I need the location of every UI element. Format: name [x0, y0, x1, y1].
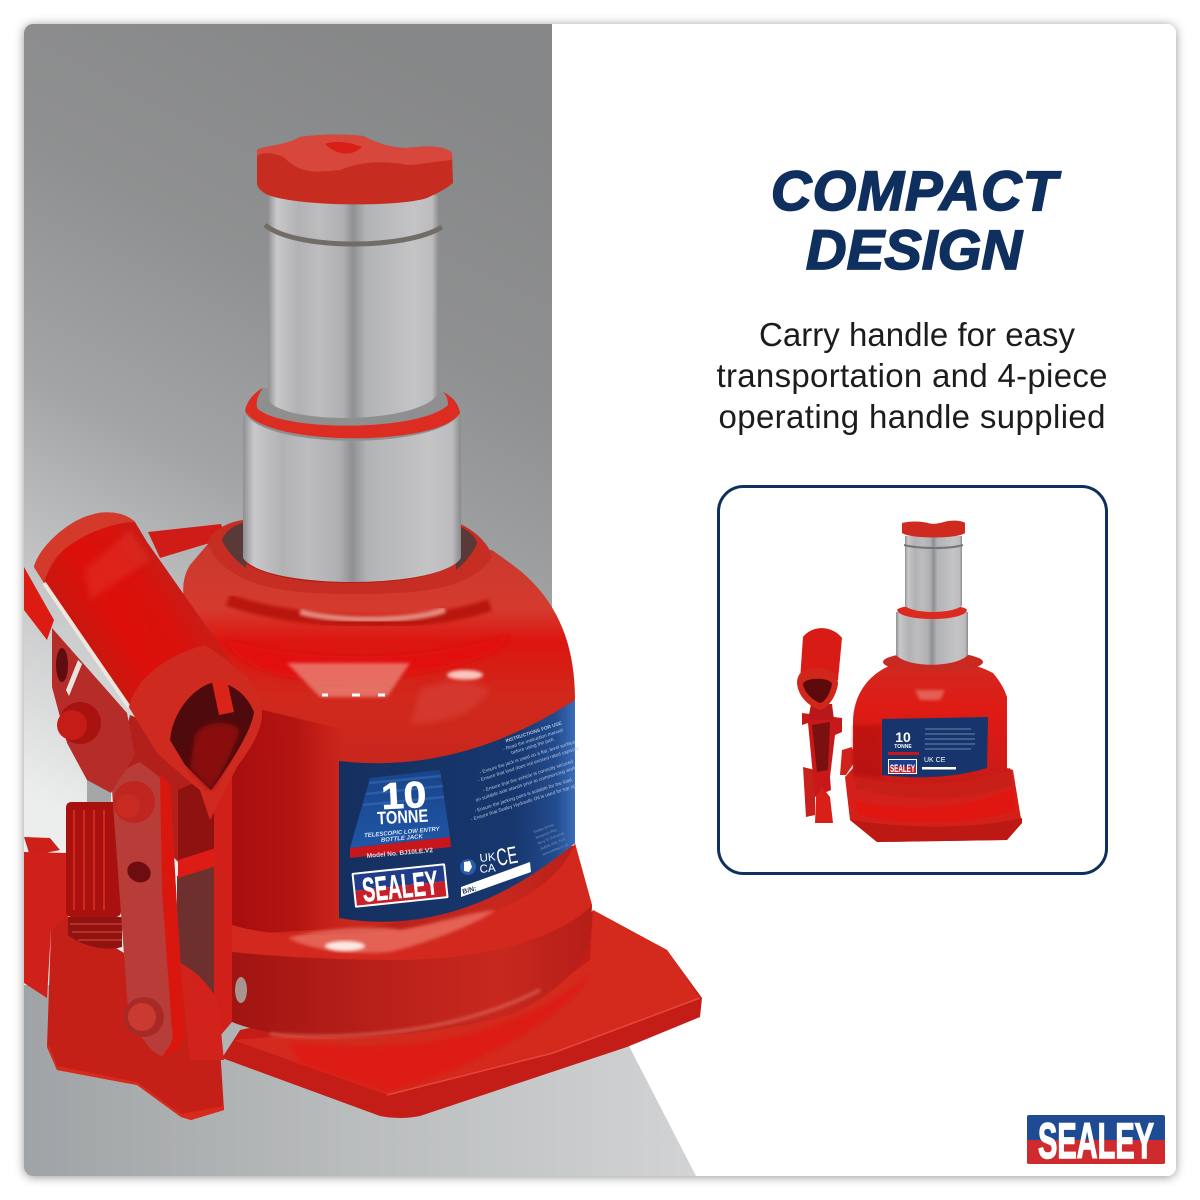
inset product photo: small jack: UK CE [924, 757, 946, 764]
product label: B/N: [462, 885, 477, 896]
upper ram cylinder [265, 195, 442, 418]
small jack collar [896, 612, 968, 665]
small jack neck [883, 652, 983, 672]
small jack ram [905, 536, 962, 612]
small jack dome [853, 659, 1007, 784]
jack dome body [183, 545, 575, 935]
small jack lever stub [803, 767, 815, 817]
weld bead [228, 600, 490, 621]
label instructions: - Read the instruction manual [502, 727, 564, 753]
rear link and dark gap [112, 715, 247, 1060]
flange wall [232, 845, 592, 1038]
inset product photo: small jack [797, 521, 1022, 842]
label address block: Kempson Way [535, 828, 558, 840]
product label: TONNE [377, 806, 429, 828]
telescopic collar [243, 388, 461, 582]
label instructions: - Ensure the jack is used on a flat, level surface. [479, 739, 578, 776]
product label: CE [494, 842, 520, 872]
inset box [718, 486, 1106, 874]
small jack cap [902, 521, 965, 538]
label address block: Sealey Group [533, 823, 554, 834]
foot plate [222, 910, 702, 1118]
small jack base [845, 768, 1022, 842]
inset product photo: small jack: TONNE [894, 744, 912, 750]
product label: Model No. BJ10LE.V2 [366, 847, 434, 860]
label instructions [471, 721, 578, 820]
label instructions: on suitable axle stands prior to commencing work. [475, 765, 578, 804]
heading: DESIGN [806, 218, 1024, 281]
small jack pump handle [797, 628, 842, 823]
product label: TELESCOPIC LOW ENTRY [364, 827, 441, 839]
label instructions: - Ensure that the vehicle is correctly secured [482, 759, 574, 794]
flange ledge [232, 843, 592, 960]
label instructions: before using the jack. [510, 736, 556, 756]
product label: CA [479, 862, 497, 876]
label instructions: - Ensure the jacking point is suitable for the load. [474, 777, 574, 814]
label address block: www.sealey.co.uk [542, 842, 569, 857]
label marks [460, 859, 476, 875]
label instructions: - Ensure that Sealey Hydraulic Oil is used for top up. [470, 783, 578, 823]
description text: Carry handle for easy [759, 316, 1076, 353]
product label: BOTTLE JACK [381, 834, 424, 844]
inset product photo: small jack: 10 [895, 729, 911, 745]
jack top cap [257, 135, 453, 204]
label address block: Suffolk IP32 7AR [540, 837, 566, 851]
label address block [534, 824, 568, 856]
description text: operating handle supplied [718, 398, 1106, 435]
bracket plate and bolt [24, 567, 135, 793]
label instructions: - Ensure that load does not exceed rated capacity [477, 745, 580, 784]
product label: UK [479, 851, 497, 865]
product label [339, 700, 591, 922]
heading: COMPACT [771, 159, 1062, 222]
heading [771, 159, 1062, 281]
label instructions: INSTRUCTIONS FOR USE [505, 720, 563, 744]
front link plate [112, 762, 185, 1056]
main product photo: bottle jack [24, 135, 702, 1120]
description text [716, 316, 1108, 435]
lower-left pump base [24, 780, 224, 1120]
label address block: Bury St. Edmunds [537, 831, 565, 845]
description text: transportation and 4-piece [716, 357, 1108, 394]
label Sealey logo [351, 863, 449, 911]
label text: 10 tonne: 10 [380, 774, 427, 817]
handle socket tube [34, 512, 262, 820]
label Sealey logo: SEALEY [360, 864, 440, 910]
jack neck ring [207, 520, 492, 594]
small jack rear bump [840, 747, 856, 775]
carry handle [148, 524, 226, 558]
small jack label [882, 717, 988, 777]
inset product photo: small jack: SEALEY [890, 763, 915, 775]
